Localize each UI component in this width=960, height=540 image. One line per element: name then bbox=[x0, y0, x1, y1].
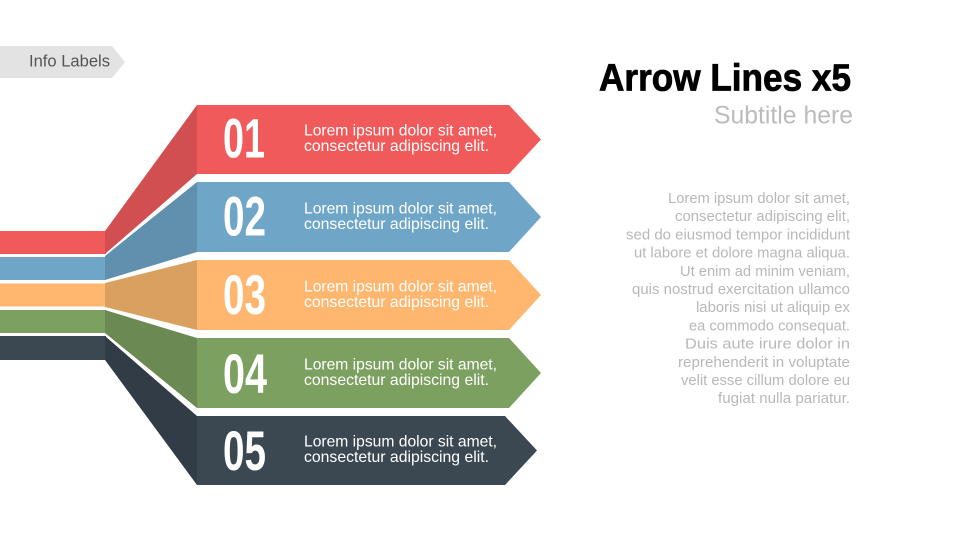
body paragraph: Duis aute irure dolor in bbox=[685, 337, 850, 353]
arrow line 01: 01 bbox=[223, 106, 265, 170]
arrow line 01: Lorem ipsum dolor sit amet, bbox=[304, 122, 497, 140]
body paragraph: laboris nisi ut aliquip ex bbox=[696, 300, 851, 316]
arrow line 05 bbox=[0, 336, 537, 485]
body paragraph: velit esse cillum dolore eu bbox=[681, 373, 850, 389]
title: Arrow Lines x5 bbox=[599, 58, 851, 100]
arrow line 04: Lorem ipsum dolor sit amet, bbox=[304, 356, 497, 374]
body paragraph: ut labore et dolore magna aliqua. bbox=[634, 246, 850, 262]
arrow line 01: consectetur adipiscing elit. bbox=[304, 138, 489, 155]
arrow line 04: 04 bbox=[223, 342, 267, 405]
arrow line 03 bbox=[0, 260, 541, 330]
arrow line 01 bbox=[0, 105, 541, 254]
body paragraph: reprehenderit in voluptate bbox=[678, 355, 850, 371]
arrow line 03: consectetur adipiscing elit. bbox=[304, 294, 489, 311]
arrow line 02: Lorem ipsum dolor sit amet, bbox=[304, 200, 497, 218]
arrow line 05: consectetur adipiscing elit. bbox=[304, 449, 489, 466]
arrow line 05: 05 bbox=[223, 419, 266, 482]
arrow line 04 bbox=[0, 310, 541, 408]
arrow line 03: 03 bbox=[223, 263, 266, 326]
arrow line 02 bbox=[0, 182, 541, 280]
subtitle: Subtitle here bbox=[714, 102, 853, 130]
body paragraph: fugiat nulla pariatur. bbox=[718, 391, 850, 407]
body paragraph: sed do eiusmod tempor incididunt bbox=[626, 227, 850, 243]
tag: info labels: Info Labels bbox=[29, 52, 110, 70]
arrow line 03: Lorem ipsum dolor sit amet, bbox=[304, 278, 497, 296]
arrow line 02: 02 bbox=[223, 184, 266, 248]
body paragraph: consectetur adipiscing elit, bbox=[675, 209, 850, 225]
body paragraph: ea commodo consequat. bbox=[689, 318, 850, 334]
body paragraph: Ut enim ad minim veniam, bbox=[680, 264, 850, 280]
arrow line 02: consectetur adipiscing elit. bbox=[304, 216, 489, 233]
body paragraph: quis nostrud exercitation ullamco bbox=[632, 282, 850, 298]
body paragraph: Lorem ipsum dolor sit amet, bbox=[668, 191, 850, 207]
tag: info labels bbox=[0, 46, 125, 78]
arrow line 05: Lorem ipsum dolor sit amet, bbox=[304, 434, 497, 450]
arrow line 04: consectetur adipiscing elit. bbox=[304, 372, 489, 389]
body paragraph bbox=[626, 191, 851, 407]
